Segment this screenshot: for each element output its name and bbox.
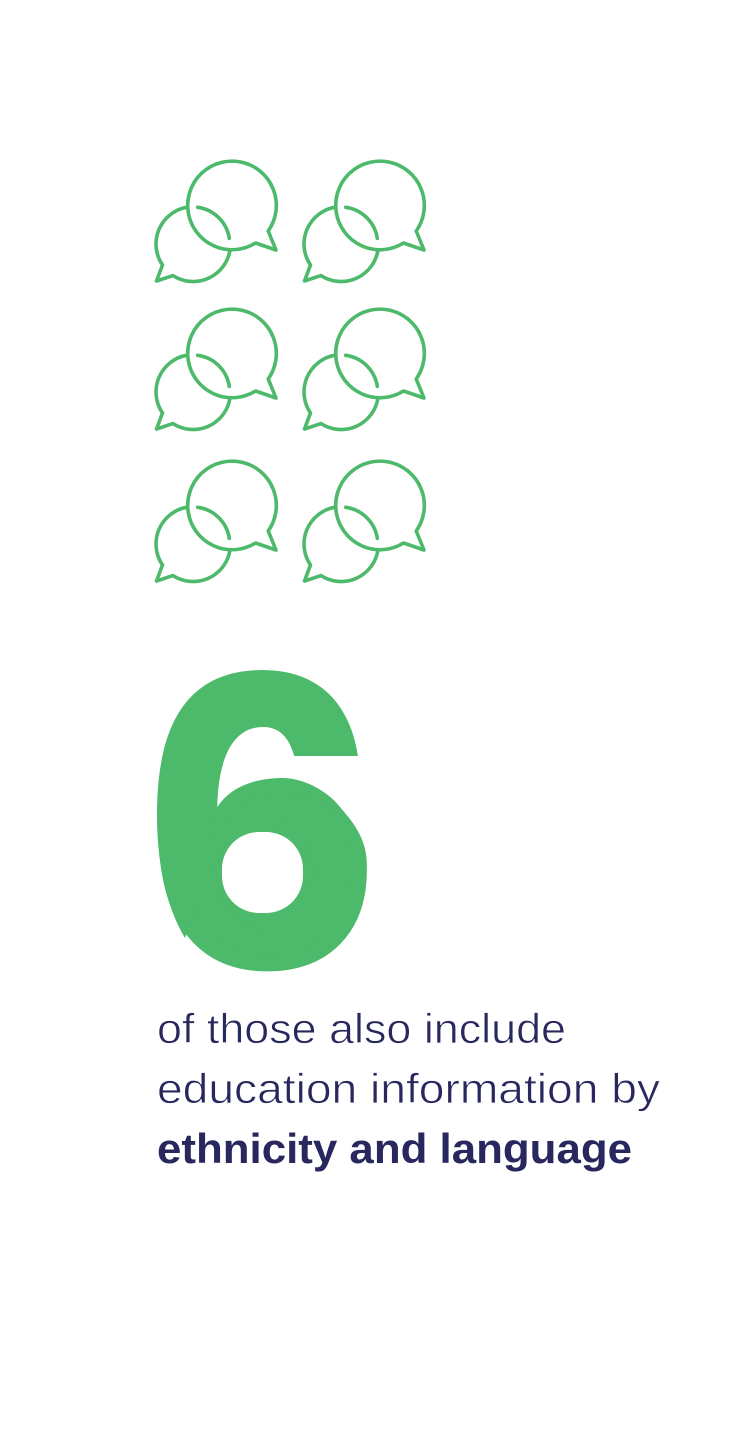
description text [157,1005,660,1172]
icon grid: speech bubbles [156,161,424,582]
line 1: of those also include [157,1005,566,1052]
icon: speech bubbles row 3 left [156,461,276,582]
icon: speech bubbles row 2 right [304,309,424,430]
icon: speech bubbles row 3 right [304,461,424,582]
big number 6: 6 [152,601,373,1043]
line 2: education information by [157,1065,660,1112]
icon: speech bubbles row 1 left [156,161,276,282]
icon: speech bubbles row 2 left [156,309,276,430]
icon: speech bubbles row 1 right [304,161,424,282]
line 3 bold: ethnicity and language [157,1125,632,1172]
